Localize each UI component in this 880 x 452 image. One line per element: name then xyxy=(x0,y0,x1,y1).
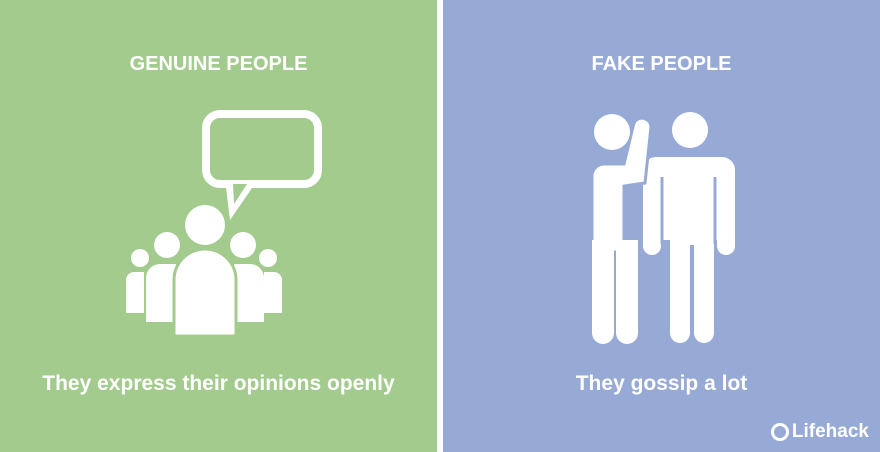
text: caption: They gossip a lot xyxy=(576,372,747,395)
logo: lifehack: Lifehack xyxy=(792,421,869,442)
icon: gossiping people xyxy=(592,112,735,344)
text: caption: They express their opinions openly xyxy=(42,372,395,395)
panel: genuine people xyxy=(0,0,437,452)
panel: fake people xyxy=(443,0,880,452)
icon: group with speech bubble xyxy=(126,110,322,334)
heading: fake people: FAKE PEOPLE xyxy=(591,53,732,75)
heading: genuine people: GENUINE PEOPLE xyxy=(130,53,307,75)
